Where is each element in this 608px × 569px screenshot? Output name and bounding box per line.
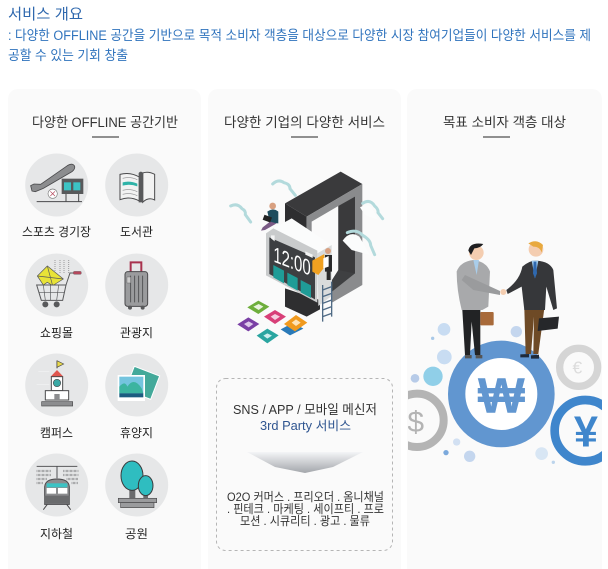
person with the panel (323, 248, 332, 280)
description text (8, 28, 591, 63)
bubbles (411, 323, 555, 464)
icon: library (105, 154, 168, 216)
icon: resort (105, 354, 168, 416)
coin: won: ₩ (478, 368, 526, 424)
panel: offline spaces (8, 89, 201, 569)
label: shopping mall: 쇼핑몰 (40, 326, 73, 340)
coin: yen: ¥ (574, 409, 598, 457)
cloud in front of the strap (343, 202, 383, 255)
illustration: isometric smartwatch (231, 172, 383, 343)
businessman: dark suit (500, 241, 559, 359)
watch body (273, 218, 332, 253)
clouds behind the watch (231, 181, 295, 222)
label: park: 공원 (125, 527, 148, 541)
app tiles (237, 301, 307, 343)
label: library: 도서관 (120, 225, 153, 239)
heading: target customers: 목표 소비자 객층 대상 (443, 115, 566, 130)
coin: euro: € (572, 357, 582, 377)
illustration: isometric smartwatch: 12:00 (273, 241, 311, 281)
heading: various services: 다양한 기업의 다양한 서비스 (224, 115, 385, 130)
icon: campus (25, 354, 88, 416)
panel: target customers (408, 115, 602, 466)
icon: park (105, 454, 168, 516)
label: subway: 지하철 (40, 527, 73, 541)
illustration: handshake on currency coins (390, 241, 608, 464)
services list (227, 490, 384, 528)
title: 서비스 개요 (8, 6, 83, 23)
services list: O2O 커머스 . 프리오더 . 옴니채널 (227, 490, 384, 504)
description text: 공할 수 있는 기회 창출 (8, 48, 128, 63)
arrow: down (247, 452, 363, 473)
label: campus: 캠퍼스 (40, 426, 73, 440)
coin: dollar: $ (407, 406, 424, 439)
icon: sports stadium (25, 154, 88, 216)
label: resort: 휴양지 (120, 426, 153, 440)
coin: euro (560, 348, 598, 386)
businessman: gray suit (457, 244, 500, 358)
coin: yen (555, 400, 608, 461)
callout subheading: 3rd Party 서비스 (260, 419, 351, 433)
icon: subway (25, 454, 88, 516)
coin: won (457, 349, 546, 439)
icon: shopping mall (25, 254, 88, 316)
person on the watch (261, 203, 278, 231)
ladder (323, 282, 332, 322)
icon: tourist site (105, 254, 168, 316)
heading: offline spaces: 다양한 OFFLINE 공간기반 (32, 115, 178, 130)
label: sports stadium: 스포츠 경기장 (22, 225, 91, 239)
panel: various services (208, 89, 401, 569)
label: tourist site: 관광지 (120, 326, 153, 340)
services list: . 핀테크 . 마케팅 . 세이프티 . 프로 (227, 502, 384, 516)
callout heading: SNS / APP / 모바일 메신저 (233, 402, 377, 417)
callout: dashed services box (216, 378, 392, 550)
coin: dollar (408, 390, 448, 451)
services list: 모션 . 시큐리티 . 광고 . 물류 (240, 514, 370, 528)
